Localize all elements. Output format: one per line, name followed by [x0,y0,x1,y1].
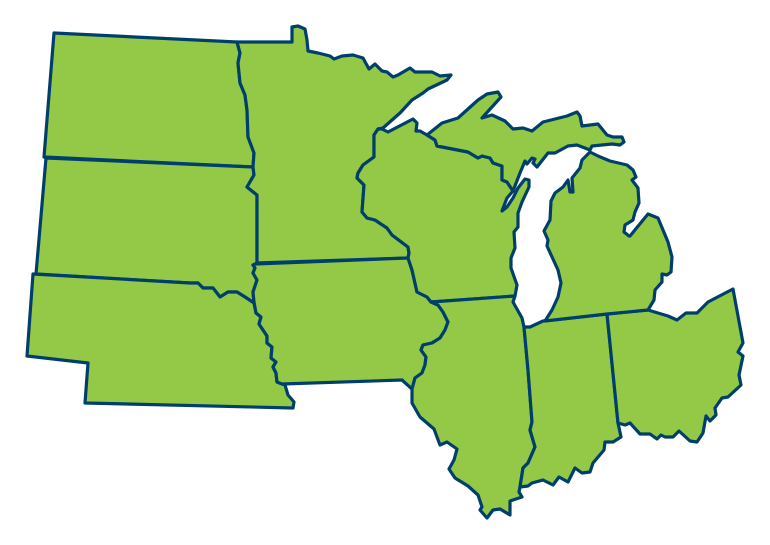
state: Ohio [607,289,743,442]
state: North Dakota [44,33,254,167]
state: Indiana [520,314,621,487]
state: Minnesota [237,26,451,263]
state: Wisconsin [357,119,529,302]
state: Illinois [412,296,535,518]
state: Nebraska [27,274,294,408]
state: Michigan upper peninsula [427,92,624,191]
state: Michigan lower peninsula [544,152,672,321]
state: South Dakota [36,158,257,303]
state: Iowa [253,258,448,389]
